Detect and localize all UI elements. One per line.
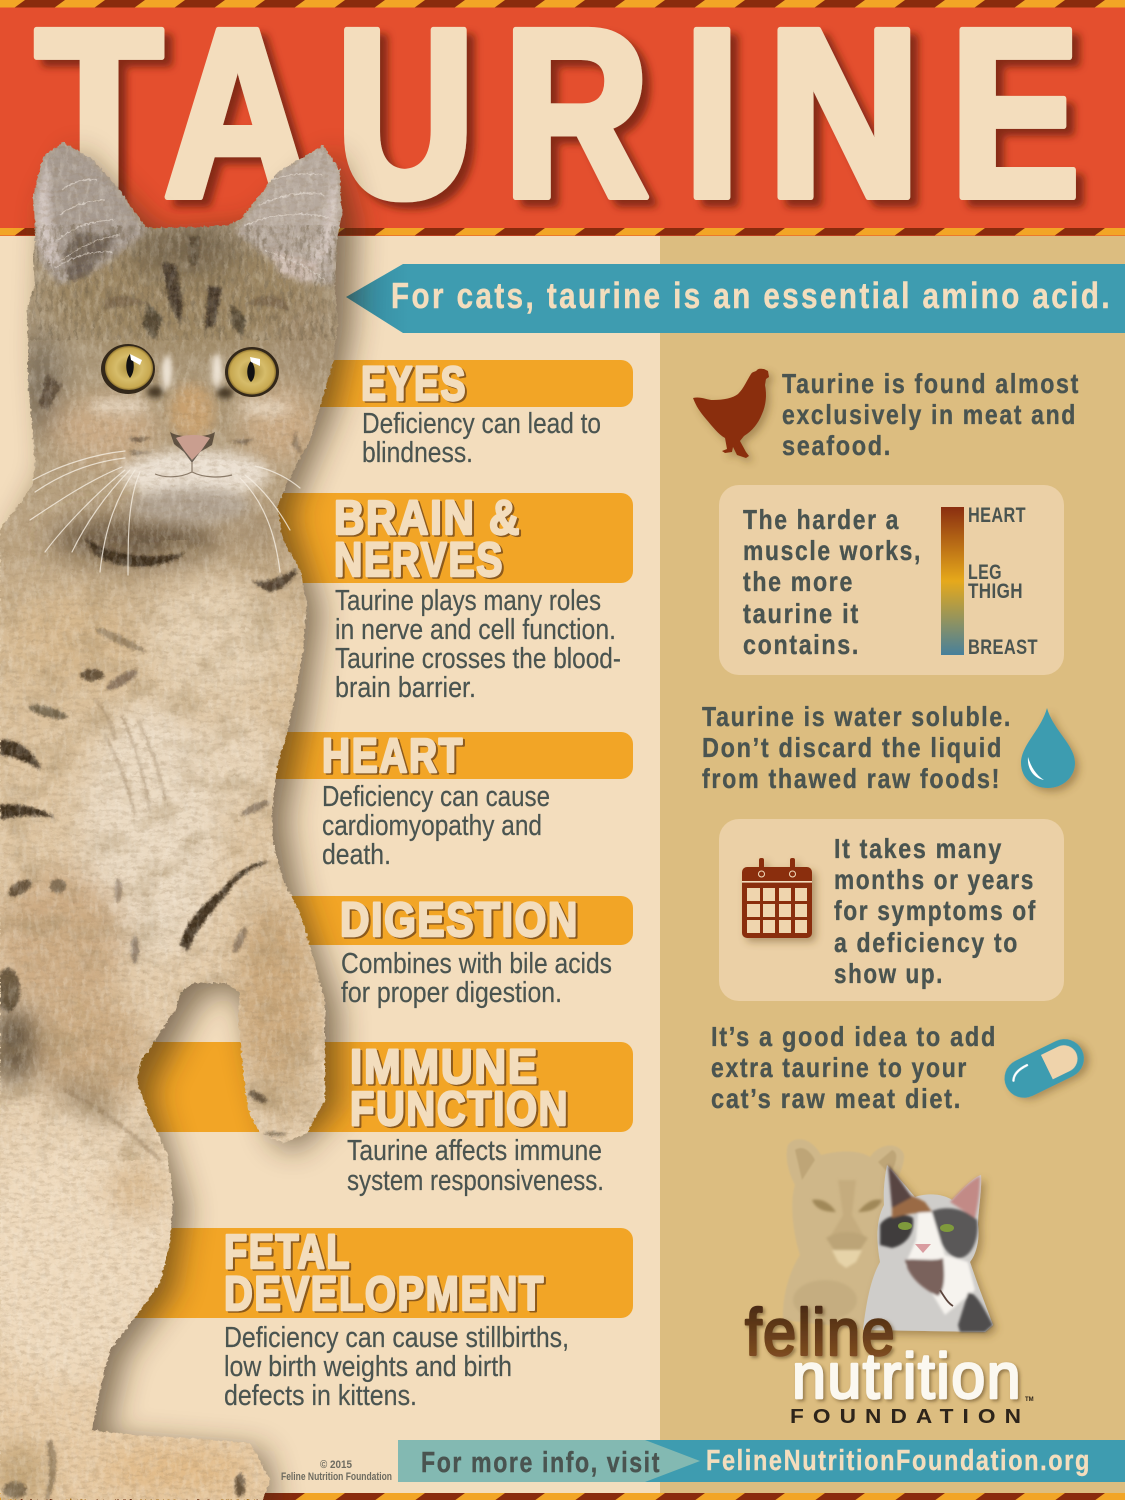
whiskers xyxy=(30,451,300,575)
panel: deficiency timing xyxy=(719,819,1064,1001)
text: brain and nerves: Taurine crosses the blood- xyxy=(335,643,621,675)
cat fur body xyxy=(0,130,350,1500)
text: digestion: Combines with bile acids xyxy=(341,948,612,980)
spots xyxy=(80,669,104,681)
scale labels: BREAST xyxy=(968,636,1038,659)
logo word: foundation: FOUNDATION xyxy=(790,1406,1030,1428)
text: fetal development: low birth weights and birth xyxy=(224,1351,512,1383)
cat drop shadow xyxy=(14,150,356,1500)
text: water soluble xyxy=(702,701,1012,794)
header band xyxy=(0,0,1125,236)
cat inner eye patches xyxy=(147,353,233,399)
logo word: nutrition: nutrition xyxy=(792,1340,1022,1412)
text: eyes: blindness. xyxy=(362,437,473,469)
text: months or years: months or years xyxy=(834,864,1035,895)
cat nose xyxy=(155,432,232,477)
background: cream left column xyxy=(0,0,660,1500)
icon: water drop xyxy=(1021,708,1075,788)
footer bar xyxy=(398,1440,1125,1482)
fur texture xyxy=(0,130,350,1500)
text: immune function: Taurine affects immune xyxy=(347,1135,602,1167)
cat photo illustration xyxy=(0,130,356,1500)
text: add extra taurine xyxy=(711,1021,997,1114)
icon: calendar xyxy=(742,858,812,938)
cat right eye xyxy=(225,347,279,397)
text: immune function: system responsiveness. xyxy=(347,1165,604,1197)
icon: capsule xyxy=(998,1033,1091,1104)
text: harder a muscle works: taurine it xyxy=(743,598,860,629)
bar: fetal development xyxy=(100,1228,633,1318)
text: months or years: It takes many xyxy=(834,833,1003,864)
heading: immune function xyxy=(350,1041,569,1136)
panel: muscle taurine xyxy=(719,485,1064,675)
heading: brain and nerves: NERVES xyxy=(334,534,504,587)
muzzle and chin xyxy=(90,384,293,524)
text: add extra taurine: It’s a good idea to add xyxy=(711,1021,997,1052)
text: fetal development xyxy=(224,1322,569,1412)
section: eyes xyxy=(361,358,601,469)
copyright: © 2015 xyxy=(320,1459,352,1471)
chest fur streaks xyxy=(65,700,165,1160)
section: heart xyxy=(322,730,550,871)
text: digestion: for proper digestion. xyxy=(341,977,562,1009)
text: months or years: for symptoms of xyxy=(834,895,1037,926)
logo: cougar xyxy=(783,1139,904,1330)
text: months or years: a deficiency to xyxy=(834,927,1019,958)
heading: fetal development: FETAL xyxy=(224,1226,351,1279)
bar: brain and nerves xyxy=(200,493,633,583)
text: heart: death. xyxy=(322,839,391,871)
banner: essential amino acid xyxy=(346,264,1125,333)
heading: fetal development xyxy=(224,1226,545,1321)
text: digestion xyxy=(341,948,612,1009)
text: heart: cardiomyopathy and xyxy=(322,810,542,842)
heading: brain and nerves xyxy=(334,492,521,587)
neck stripes xyxy=(85,538,185,567)
bar: heart xyxy=(200,732,633,779)
heading: brain and nerves: BRAIN & xyxy=(334,492,521,545)
heading: immune function: IMMUNE xyxy=(350,1041,539,1094)
text: harder a muscle works: The harder a xyxy=(743,504,900,535)
bar: eyes xyxy=(200,360,633,407)
text: add extra taurine: extra taurine to your xyxy=(711,1052,968,1083)
lower hazard stripe xyxy=(0,228,1125,236)
light fur texture xyxy=(0,130,350,1500)
text: brain and nerves: brain barrier. xyxy=(335,672,476,704)
text: immune function xyxy=(347,1135,604,1197)
scale labels: THIGH xyxy=(968,580,1023,603)
text: add extra taurine: cat’s raw meat diet. xyxy=(711,1083,962,1114)
heading: fetal development: DEVELOPMENT xyxy=(224,1268,545,1321)
text: fetal development: defects in kittens. xyxy=(224,1380,417,1412)
chest and body tones xyxy=(145,580,285,700)
mottled body blotches xyxy=(0,540,350,1160)
text: water soluble: Taurine is water soluble. xyxy=(702,701,1012,732)
icon: chicken xyxy=(693,369,769,458)
neck shading xyxy=(50,518,220,562)
section: digestion xyxy=(340,894,612,1009)
text: heart: Deficiency can cause xyxy=(322,781,550,813)
text: found in meat and seafood xyxy=(782,368,1080,461)
footer arrow xyxy=(398,1440,700,1482)
section: immune function xyxy=(347,1041,604,1197)
logo: calico cat with mouse xyxy=(863,1165,993,1332)
heading: immune function: FUNCTION xyxy=(350,1083,569,1136)
copyright: Feline Nutrition Foundation xyxy=(281,1471,392,1483)
text: eyes: Deficiency can lead to xyxy=(362,408,601,440)
text: eyes xyxy=(362,408,601,469)
top hazard stripe xyxy=(0,0,1125,8)
copyright xyxy=(281,1459,392,1483)
bottom hazard stripe xyxy=(0,1493,1125,1500)
forehead fur texture xyxy=(25,225,345,340)
background: tan right column xyxy=(660,0,1125,1500)
section: brain and nerves xyxy=(334,492,621,704)
text: brain and nerves: in nerve and cell function. xyxy=(335,614,616,646)
gradient scale xyxy=(941,507,964,655)
text: water soluble: Don’t discard the liquid xyxy=(702,732,1003,763)
text: harder a muscle works: muscle works, xyxy=(743,535,922,566)
head shading xyxy=(45,237,325,353)
scale labels: LEG xyxy=(968,561,1002,584)
text: fetal development: Deficiency can cause stillbirths, xyxy=(224,1322,569,1354)
arm stripe xyxy=(180,862,270,952)
tabby markings xyxy=(38,236,302,456)
text: heart xyxy=(322,781,550,871)
bar: digestion xyxy=(200,896,633,945)
orange heading bars xyxy=(100,360,633,1318)
text: water soluble: from thawed raw foods! xyxy=(702,763,1001,794)
text: brain and nerves xyxy=(335,585,621,704)
footer text: for more info: For more info, visit xyxy=(421,1447,661,1479)
heading: digestion: DIGESTION xyxy=(340,894,579,947)
text: brain and nerves: Taurine plays many roles xyxy=(335,585,601,617)
text: harder a muscle works xyxy=(743,504,922,660)
text: harder a muscle works: the more xyxy=(743,566,854,597)
title xyxy=(36,0,1079,249)
ear hair streaks xyxy=(55,174,330,280)
heading: heart: HEART xyxy=(322,730,464,783)
text: harder a muscle works: contains. xyxy=(743,629,860,660)
heading: eyes: EYES xyxy=(361,358,467,411)
bar: immune function xyxy=(100,1042,633,1132)
ears xyxy=(33,142,342,285)
text: months or years: show up. xyxy=(834,958,944,989)
text: months or years xyxy=(834,833,1037,989)
section: fetal development xyxy=(224,1226,569,1412)
trademark: TM xyxy=(1025,1397,1034,1403)
text: found in meat and seafood: seafood. xyxy=(782,430,892,461)
logo word: feline: feline xyxy=(745,1295,896,1369)
scale labels: HEART xyxy=(968,504,1026,527)
logo: feline nutrition foundation xyxy=(745,1139,1034,1428)
scale labels xyxy=(968,504,1038,659)
cat left eye xyxy=(101,344,155,394)
